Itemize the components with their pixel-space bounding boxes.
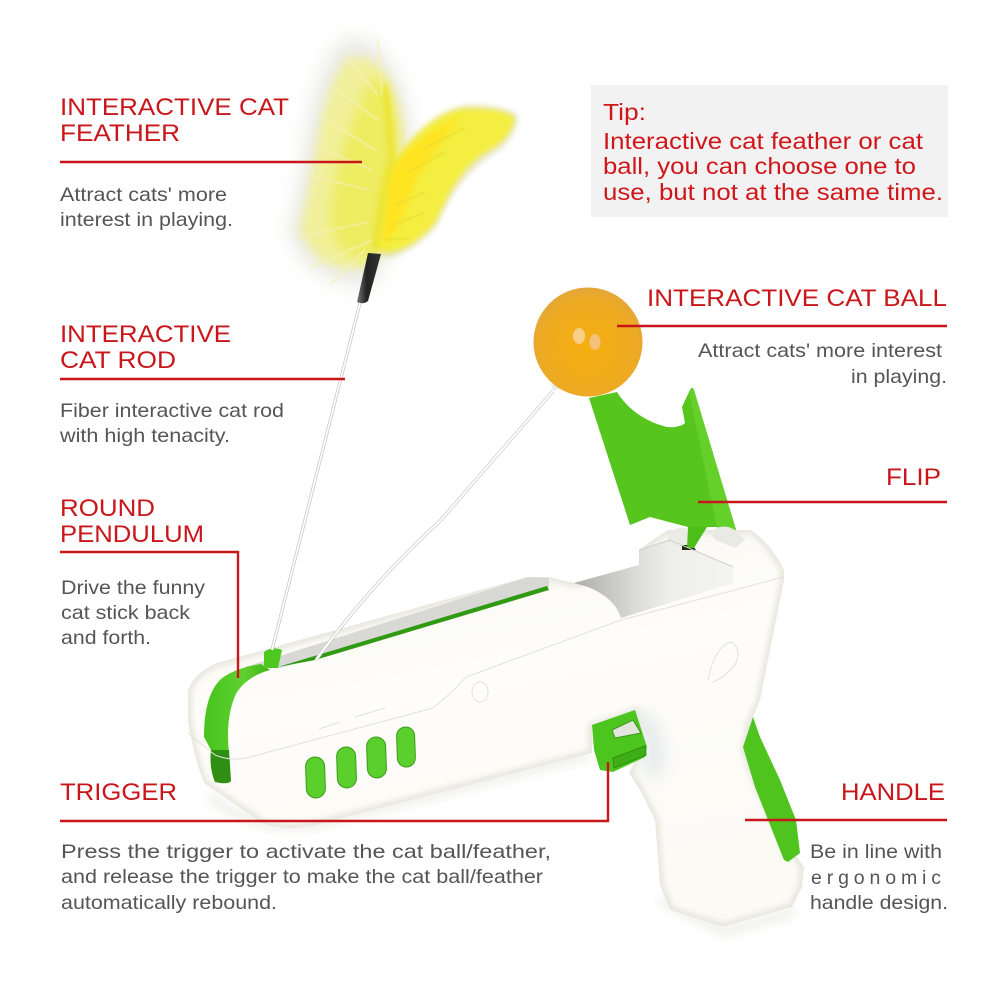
rod base nub [264, 648, 282, 668]
callout: trigger: TRIGGER [60, 779, 177, 806]
callout: trigger: automatically rebound. [61, 892, 277, 914]
callout: interactive cat rod: Fiber interactive cat rod [60, 400, 284, 422]
callout: round pendulum: PENDULUM [60, 521, 204, 548]
seam lines [188, 577, 784, 759]
white shell [188, 530, 804, 927]
green slot strip [278, 586, 549, 667]
pendulum lower slot [210, 750, 231, 783]
callout: interactive cat feather [60, 94, 362, 231]
callout: round pendulum: cat stick back [61, 602, 190, 624]
tip box [591, 85, 948, 217]
icon: feather black tube [357, 253, 381, 303]
callout: round pendulum [60, 495, 238, 678]
gun shadow [210, 755, 795, 932]
callout: interactive cat feather: INTERACTIVE CAT [60, 94, 289, 121]
callout: interactive cat feather: Attract cats' more [60, 184, 227, 206]
interactive ball rod [316, 391, 553, 660]
soft edge shading [188, 530, 804, 927]
callout: interactive cat ball: Attract cats' more interest [698, 340, 943, 362]
callout: handle [745, 779, 948, 914]
slot [245, 577, 549, 668]
callout: interactive cat rod [59, 321, 345, 447]
cat rod for feather [272, 303, 360, 650]
callout: round pendulum: and forth. [61, 627, 151, 649]
handle grip [743, 717, 800, 862]
tip box: Interactive cat feather or cat [603, 128, 924, 154]
tip box: Tip: [603, 99, 646, 125]
flip [589, 388, 737, 548]
callout: interactive cat ball: in playing. [851, 366, 947, 388]
callout: interactive cat feather: FEATHER [60, 120, 180, 147]
callout: interactive cat ball: INTERACTIVE CAT BALL [647, 285, 947, 312]
vents [305, 727, 416, 798]
callout: trigger: Press the trigger to activate the cat ball/feather, [61, 841, 551, 863]
callout: handle: HANDLE [841, 779, 945, 806]
callout: handle: ergonomic [811, 867, 941, 889]
cavity [574, 540, 733, 618]
callout: handle: handle design. [810, 892, 948, 914]
top cap [639, 526, 745, 567]
callout: round pendulum: Drive the funny [61, 577, 205, 599]
callout: trigger: and release the trigger to make the cat ball/feather [61, 866, 544, 888]
callout: interactive cat rod: CAT ROD [60, 347, 176, 374]
toy gun body [188, 526, 804, 927]
callout: trigger [60, 762, 608, 914]
cat ball [534, 288, 642, 396]
round pendulum [204, 664, 270, 753]
callout: flip: FLIP [886, 464, 941, 491]
callout: interactive cat ball [617, 285, 947, 388]
callout: interactive cat rod: with high tenacity. [59, 425, 230, 447]
callout: interactive cat rod: INTERACTIVE [60, 321, 231, 348]
callout: handle: Be in line with [810, 841, 942, 863]
callout: round pendulum: ROUND [60, 495, 155, 522]
tip box: ball, you can choose one to [603, 153, 916, 179]
icon: yellow feather [288, 37, 518, 286]
callout: interactive cat feather: interest in playing. [60, 209, 233, 231]
trigger [592, 710, 647, 772]
tip box: use, but not at the same time. [603, 179, 943, 205]
